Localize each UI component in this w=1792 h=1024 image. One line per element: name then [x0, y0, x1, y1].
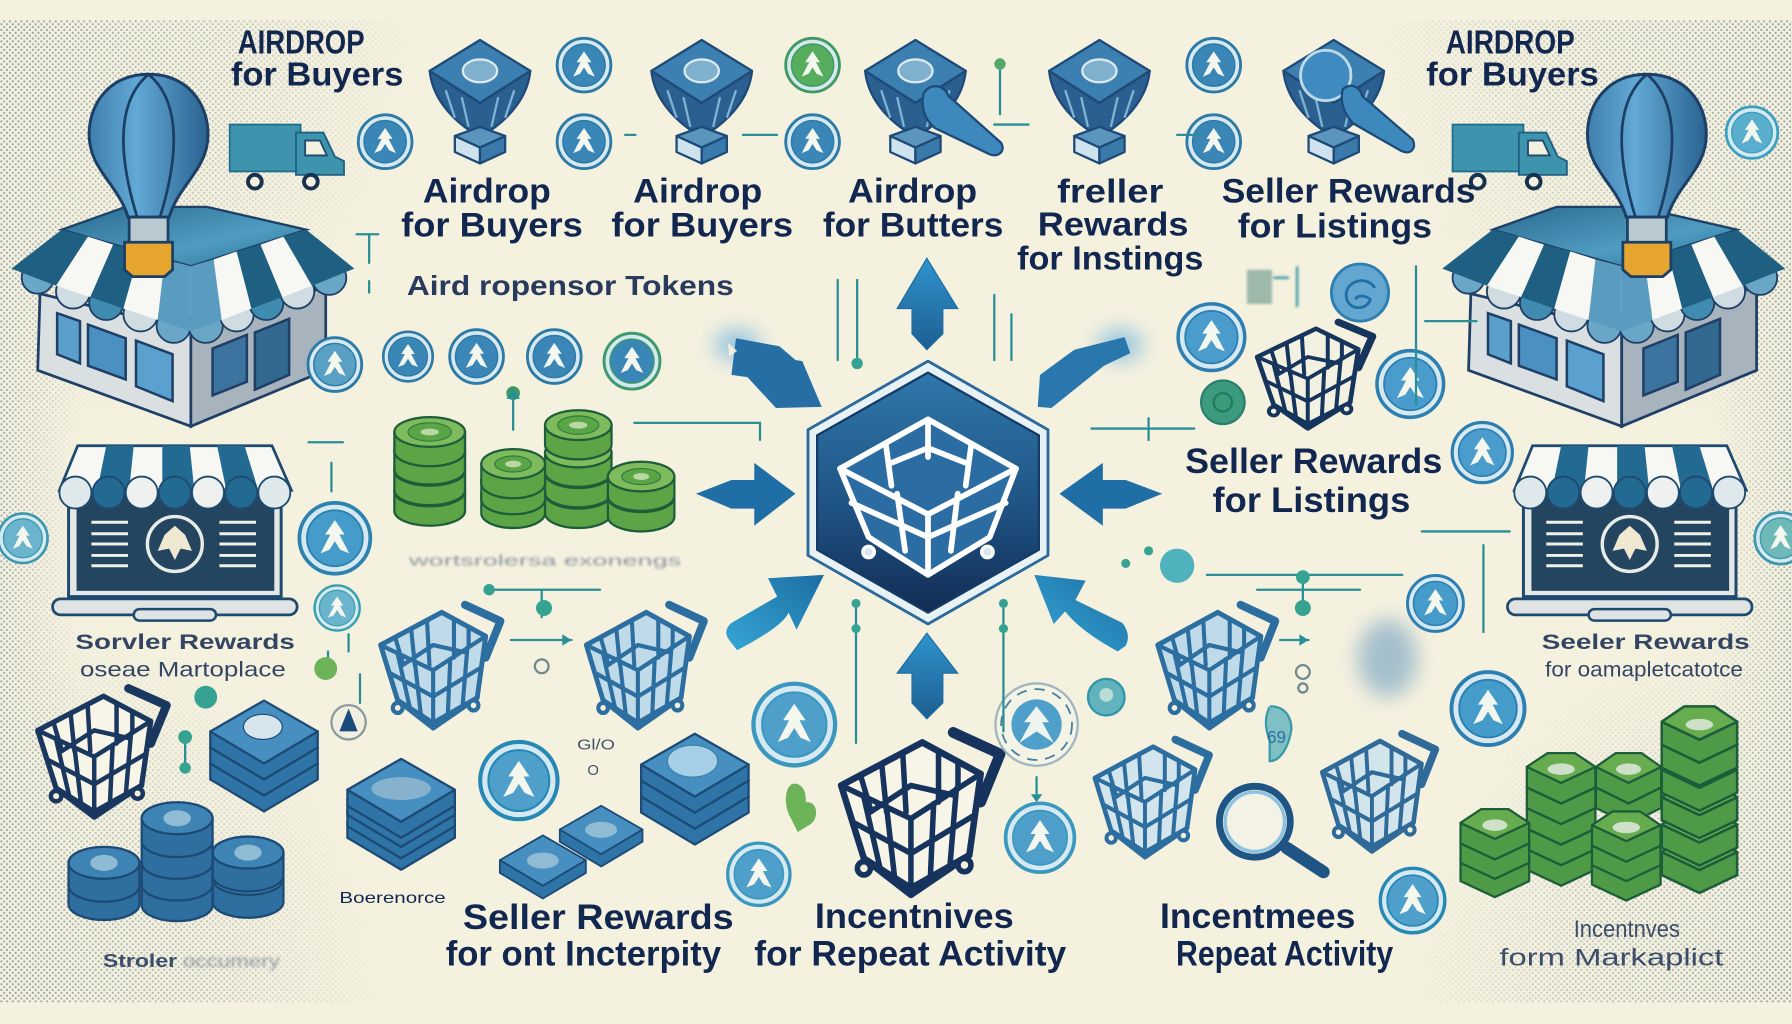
- chart: blue coin stacks: [69, 802, 283, 921]
- icon: dark cart upper right: [1257, 322, 1373, 429]
- text: tiny circle mark: O: [587, 763, 599, 779]
- icon: blurred blob: [1358, 619, 1417, 697]
- icon: airdrop crate 5 with tool: [1283, 40, 1414, 163]
- text: blurred label bottom left: [103, 950, 281, 971]
- coins: right cluster: [1178, 304, 1512, 483]
- coin: top right token: [1726, 107, 1778, 158]
- icon: blurred connector block: [1247, 267, 1297, 306]
- coins: bottom tokens: [480, 684, 1445, 933]
- heading: seller rewards bottom: Seller Rewards: [463, 897, 734, 937]
- icon: airdrop crate 2: [651, 40, 752, 163]
- connectors: thin teal lines and dots: [178, 58, 1510, 802]
- icon: cart 3: [1158, 605, 1275, 728]
- icon: dark cart left: [38, 688, 167, 817]
- icon: token slabs: [500, 806, 643, 899]
- text: airdrop tokens: Aird ropensor Tokens: [407, 270, 734, 301]
- arrow: right: [1059, 463, 1162, 526]
- icon: airdrop crate 1: [430, 40, 530, 163]
- text: seller rewards marketplace left: oseae Martoplace: [80, 657, 286, 682]
- text: seller rewards marketplace left: Sorvler Rewards: [75, 629, 295, 654]
- arrow: left: [696, 463, 795, 526]
- coin: spiral token: [1331, 264, 1389, 321]
- icon: magnifier: [1219, 786, 1323, 872]
- chart: blue box stack left: [210, 701, 318, 811]
- text: seller rewards marketplace right: for oamapletcatotce: [1545, 657, 1743, 682]
- arrow: lower left: [726, 575, 824, 650]
- coins: left side lower: [0, 503, 370, 631]
- icon: large dark cart: [841, 732, 1000, 895]
- heading: top right airdrop: AIRDROP: [1446, 25, 1575, 62]
- headings: airdrop column labels: Airdrop: [423, 172, 551, 210]
- chart: green token stacks left: [394, 410, 674, 531]
- heading: airdrop butters: Airdrop: [848, 172, 977, 210]
- heading: incentives repeat activity: for Repeat Activity: [754, 934, 1067, 974]
- text: incentives marketplace: form Markaplict: [1499, 945, 1724, 972]
- heading: seller rewards middle: for Listings: [1213, 480, 1410, 520]
- icon: green pin: [786, 784, 816, 832]
- heading: seller rewards top: for Listings: [1238, 208, 1432, 246]
- icon: right delivery truck: [1453, 125, 1567, 189]
- icon: teal balloon pin: 69: [1267, 727, 1286, 747]
- headings: airdrop column labels: for Buyers: [401, 207, 583, 245]
- heading: seller rewards bottom: for ont Incterpity: [446, 934, 721, 974]
- text: small label: Boerenorce: [339, 890, 446, 907]
- icon: teal balloon pin: [1266, 706, 1291, 761]
- heading: seller rewards top: Seller Rewards: [1222, 172, 1475, 210]
- heading: top right airdrop: for Buyers: [1426, 57, 1599, 94]
- chart: green hex stacks right: [1461, 706, 1737, 901]
- icon: central cart: [840, 419, 1016, 575]
- icon: cart 4: [1095, 740, 1209, 857]
- icon: airdrop crate 4: [1049, 40, 1150, 163]
- text: seller rewards marketplace right: Seeler Rewards: [1542, 629, 1750, 654]
- heading: freller rewards: Rewards: [1038, 206, 1189, 243]
- text: blurred caption: wortsrolersa exonengs: [407, 554, 681, 570]
- panel: right laptop storefront: [1507, 446, 1752, 621]
- panel: central hexagon cart: [808, 361, 1048, 624]
- icon: cart 2: [586, 605, 704, 728]
- arrow: bottom up: [897, 633, 958, 719]
- icon: airdrop crate 3 with tool: [865, 40, 1003, 163]
- text: incentives marketplace: Incentnves: [1574, 916, 1680, 943]
- arrow: lower right: [1034, 575, 1128, 651]
- coin: small teal token: [1088, 679, 1125, 715]
- heading: airdrop buyers 2: for Buyers: [611, 207, 793, 245]
- icon: small dark pin: [331, 705, 366, 739]
- text: blurred label bottom left: occumery: [183, 951, 281, 971]
- panel: left storefront with balloon: [11, 74, 354, 426]
- chart: blue box stack centre: [641, 734, 749, 845]
- icon: left delivery truck: [230, 125, 344, 189]
- coin row: middle left tokens: [308, 330, 660, 391]
- heading: freller rewards: for Instings: [1017, 241, 1203, 278]
- heading: seller rewards middle: Seller Rewards: [1185, 441, 1442, 481]
- icon: cart 5: [1322, 734, 1435, 851]
- arrow: upper left with glow: [714, 329, 822, 408]
- panel: right storefront with balloon: [1442, 74, 1785, 426]
- text: blurred label bottom left: Stroler: [103, 950, 177, 971]
- heading: incentives repeat activity: Incentnives: [815, 896, 1014, 936]
- icon: cart 1: [381, 605, 500, 728]
- coin: green token: [786, 38, 839, 92]
- heading: incentives repeat activity right: Incentmees: [1160, 896, 1355, 936]
- chart: stacked paper tokens: [347, 759, 455, 870]
- panel: left laptop storefront: [53, 446, 297, 621]
- coin: small green token: [1201, 381, 1245, 424]
- heading: top left airdrop: for Buyers: [231, 57, 403, 94]
- arrow: top up: [897, 258, 958, 350]
- heading: airdrop butters: for Butters: [823, 207, 1003, 245]
- coin: dashed ring token: [995, 683, 1078, 766]
- coin row: top tokens: [358, 38, 1241, 169]
- arrow: upper right with glow: [1038, 329, 1143, 408]
- heading: top left airdrop: AIRDROP: [238, 25, 365, 62]
- coins: right side lower: [1407, 513, 1792, 745]
- heading: freller rewards: freller: [1057, 173, 1164, 210]
- heading: incentives repeat activity right: Repeat Activity: [1176, 934, 1393, 974]
- text: tiny label: Gl/O: [577, 738, 615, 754]
- heading: airdrop buyers 2: Airdrop: [633, 172, 762, 210]
